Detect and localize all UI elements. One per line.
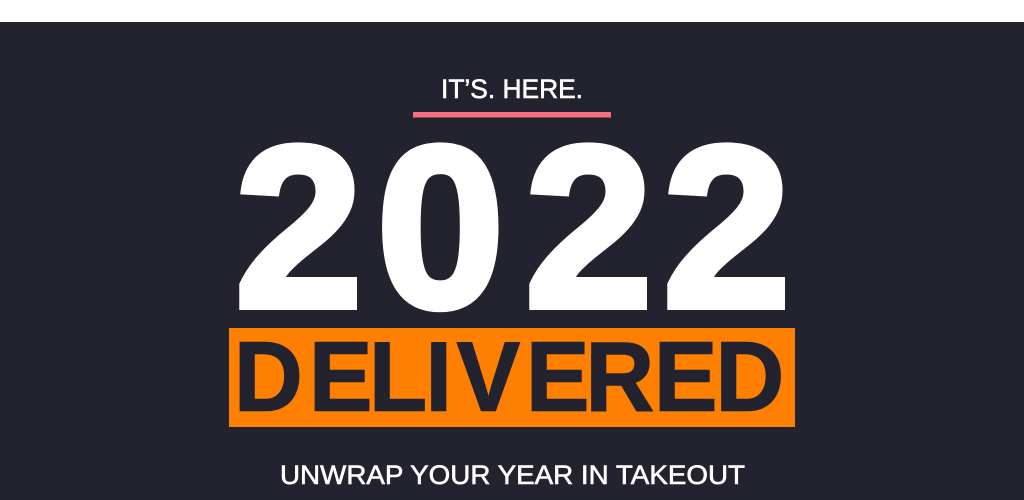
tagline: UNWRAP YOUR YEAR IN TAKEOUT	[280, 460, 745, 490]
orange banner with DELIVERED: DELIVERED	[234, 323, 784, 432]
pink underline	[413, 112, 611, 118]
eyebrow text: IT'S. HERE.: IT’S. HERE.	[441, 74, 583, 104]
headline year 2022: 2022	[235, 98, 791, 356]
